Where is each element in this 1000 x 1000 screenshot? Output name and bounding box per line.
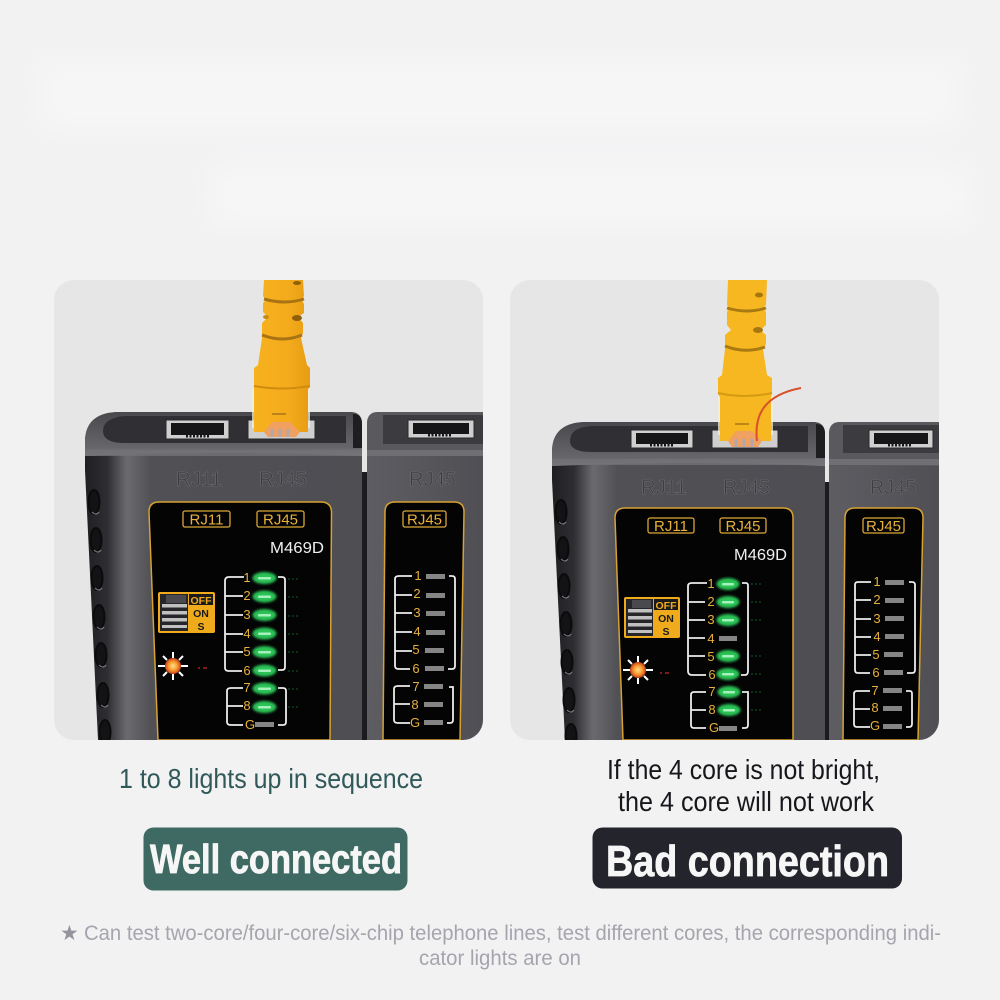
LED numbers: G xyxy=(709,720,719,735)
port: RJ45 xyxy=(712,430,778,448)
remote tester body xyxy=(367,412,483,740)
LED numbers: 6 xyxy=(708,667,716,682)
remote tester body: RJ45 xyxy=(409,469,456,491)
model name: M469D xyxy=(270,540,324,557)
LED numbers: 1 xyxy=(243,570,251,585)
label: RJ11: RJ11 xyxy=(190,512,223,528)
power switch: OFF xyxy=(656,600,677,612)
display panel xyxy=(615,508,793,740)
remote display panel xyxy=(383,502,464,740)
caption: bad connection: If the 4 core is not bright, xyxy=(607,754,880,785)
side grip ridges xyxy=(88,490,110,744)
LED numbers: 1 xyxy=(707,576,715,591)
remote display panel: 6 xyxy=(412,661,420,676)
LED brackets main xyxy=(225,577,286,725)
footnote: Can test two-core/four-core/six-chip telephone lines, test different cores, the corresponding indi- xyxy=(84,922,941,945)
yellow network cable plug xyxy=(718,280,773,447)
LED numbers: 5 xyxy=(243,644,251,659)
broken red wire xyxy=(757,388,801,441)
badge: well connected: Well connected xyxy=(150,836,402,882)
label: RJ45: RJ45 xyxy=(263,512,298,528)
display panel xyxy=(149,502,332,740)
remote display panel: 8 xyxy=(871,700,879,715)
power switch xyxy=(158,592,215,633)
remote display panel: 6 xyxy=(872,665,880,680)
main tester body xyxy=(552,422,829,740)
power indicator light xyxy=(623,656,669,684)
caption: bad connection xyxy=(607,754,880,817)
badge: well connected xyxy=(144,828,408,890)
embossed port names: RJ45 xyxy=(723,477,770,499)
caption: well connected: 1 to 8 lights up in sequence xyxy=(119,763,423,794)
remote display panel xyxy=(843,508,923,740)
green LEDs with core 4 dark xyxy=(716,578,763,731)
remote display panel: 4 xyxy=(873,629,881,644)
remote display panel: 5 xyxy=(412,642,420,657)
power switch: S xyxy=(662,626,670,638)
LED numbers: 4 xyxy=(243,626,251,641)
remote display panel: 5 xyxy=(872,647,880,662)
LED numbers: G xyxy=(245,717,255,732)
port: RJ11 xyxy=(631,430,693,448)
power switch xyxy=(624,597,680,638)
panel: bad connection tester xyxy=(510,280,939,748)
label: RJ11: RJ11 xyxy=(654,518,688,535)
model name: M469D xyxy=(734,547,787,564)
label: RJ45: RJ45 xyxy=(725,518,761,535)
port: RJ11 xyxy=(166,420,229,439)
remote display panel: 3 xyxy=(873,611,881,626)
LED numbers: 4 xyxy=(707,631,715,646)
panel: well connected tester xyxy=(54,280,483,744)
LED numbers: 3 xyxy=(243,607,251,622)
footnote: ★ xyxy=(60,922,79,945)
power switch: OFF xyxy=(190,595,212,607)
port: RJ45 xyxy=(248,420,315,439)
embossed port names xyxy=(178,472,306,486)
green LEDs xyxy=(252,572,300,727)
LED numbers: 7 xyxy=(243,680,251,695)
remote display panel: 4 xyxy=(413,624,421,639)
LED brackets main xyxy=(688,583,748,728)
footnote xyxy=(60,922,941,970)
remote display panel: 3 xyxy=(413,605,421,620)
LED numbers xyxy=(707,576,719,735)
remote display panel: RJ45 xyxy=(866,518,901,535)
remote display panel: 7 xyxy=(412,679,420,694)
remote tester body xyxy=(829,422,939,740)
remote display panel: G xyxy=(410,715,420,730)
LED numbers: 2 xyxy=(243,588,251,603)
badge: bad connection: Bad connection xyxy=(606,837,889,886)
embossed port names: RJ11 xyxy=(641,477,687,499)
side grip ridges xyxy=(556,500,576,748)
remote tester body: RJ45 xyxy=(870,477,916,499)
remote display panel: RJ45 xyxy=(407,512,442,528)
LED numbers: 7 xyxy=(708,684,716,699)
remote display panel: 2 xyxy=(413,586,421,601)
LED numbers xyxy=(243,570,255,732)
yellow network cable plug xyxy=(252,280,310,437)
main tester body xyxy=(85,412,367,740)
LED numbers: 8 xyxy=(708,702,716,717)
LED numbers: 5 xyxy=(707,649,715,664)
power indicator light xyxy=(158,652,207,680)
embossed port names: RJ45 xyxy=(259,469,307,491)
caption: bad connection: the 4 core will not work xyxy=(618,786,875,817)
footnote: cator lights are on xyxy=(419,947,581,970)
blank faded header area xyxy=(40,60,970,225)
power switch: S xyxy=(197,621,205,633)
embossed port names xyxy=(642,480,770,494)
remote display panel: G xyxy=(870,718,880,733)
remote display panel: 2 xyxy=(873,592,881,607)
power switch: ON xyxy=(658,613,674,625)
LED numbers: 2 xyxy=(707,594,715,609)
LED numbers: 6 xyxy=(243,663,251,678)
remote display panel: 8 xyxy=(411,697,419,712)
remote display panel: 7 xyxy=(871,683,879,698)
power switch: ON xyxy=(193,608,209,620)
embossed port names: RJ11 xyxy=(176,469,222,491)
remote display panel: 1 xyxy=(414,568,422,583)
remote display panel: 1 xyxy=(873,574,881,589)
LED numbers: 3 xyxy=(707,612,715,627)
LED numbers: 8 xyxy=(243,698,251,713)
